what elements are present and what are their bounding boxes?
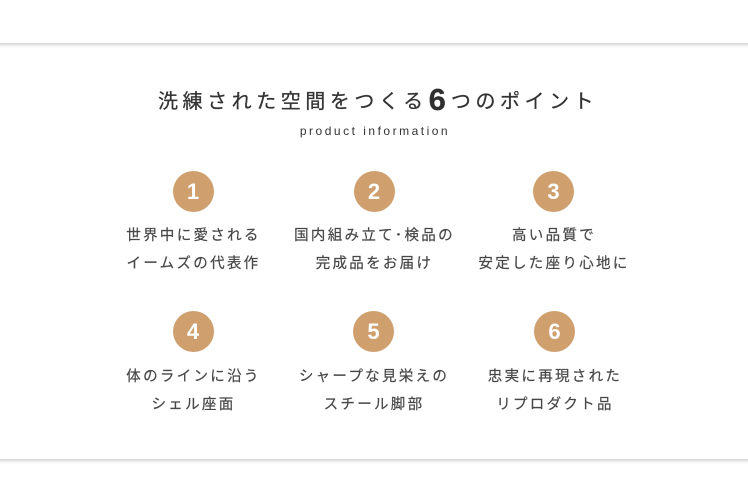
number badge 3: 3 bbox=[547, 179, 560, 204]
point 1 text line 1: 世界中に愛される bbox=[126, 228, 261, 244]
point 5 text line 1: シャープな見栄えの bbox=[299, 369, 449, 385]
top rule with shadow bbox=[0, 43, 748, 48]
point 2 bbox=[294, 171, 455, 272]
point 2 text line 1: 国内組み立て･検品の bbox=[294, 228, 455, 244]
point 3 text line 2: 安定した座り心地に bbox=[478, 256, 630, 272]
number badge 6: 6 bbox=[548, 319, 561, 344]
number badge 1 bbox=[172, 171, 214, 212]
number badge 1: 1 bbox=[187, 179, 199, 204]
number badge 4 bbox=[172, 311, 214, 352]
bottom rule with shadow bbox=[0, 459, 748, 464]
number badge 6 bbox=[534, 311, 575, 352]
subtitle: product information bbox=[300, 124, 450, 138]
point 1 text line 2: イームズの代表作 bbox=[127, 256, 260, 272]
point 6 bbox=[488, 311, 622, 413]
point 6 text line 2: リプロダクト品 bbox=[496, 397, 614, 413]
number badge 5 bbox=[353, 311, 394, 352]
point 3 text line 1: 高い品質で bbox=[512, 228, 596, 244]
point 4 bbox=[126, 311, 261, 413]
number badge 2: 2 bbox=[368, 179, 380, 204]
number badge 5: 5 bbox=[367, 319, 380, 344]
point 5 bbox=[299, 311, 449, 413]
point 3 bbox=[478, 171, 630, 272]
point 6 text line 1: 忠実に再現された bbox=[488, 369, 622, 385]
point 2 text line 2: 完成品をお届け bbox=[316, 256, 433, 272]
title: 洗練された空間をつくる6つのポイント bbox=[158, 82, 598, 117]
point 1 bbox=[126, 171, 261, 272]
number badge 2 bbox=[354, 171, 394, 212]
number badge 4: 4 bbox=[187, 319, 199, 344]
point 5 text line 2: スチール脚部 bbox=[324, 397, 424, 413]
point 4 text line 1: 体のラインに沿う bbox=[126, 369, 261, 385]
point 4 text line 2: シェル座面 bbox=[152, 397, 236, 413]
number badge 3 bbox=[533, 171, 574, 212]
